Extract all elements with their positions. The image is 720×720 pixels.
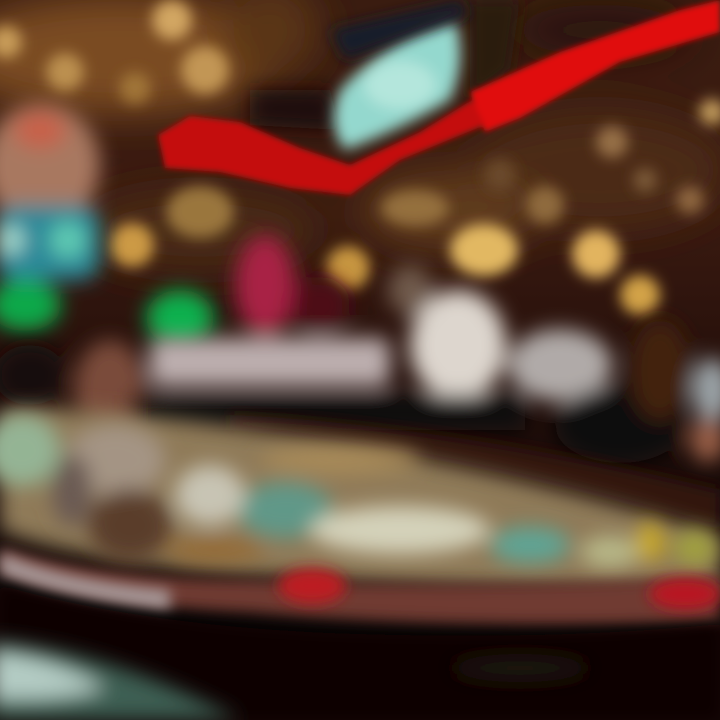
felt bbox=[0, 408, 720, 590]
ceiling glow bbox=[0, 0, 720, 270]
table rail back bbox=[230, 415, 720, 530]
table edge bbox=[0, 548, 720, 624]
teal screen bbox=[334, 20, 460, 150]
dark ceiling beam bbox=[470, 0, 520, 100]
left sign bbox=[0, 103, 214, 346]
red ribbon bbox=[158, 0, 720, 195]
foreground chip bbox=[0, 640, 240, 720]
lower dark table base bbox=[0, 585, 720, 720]
table surface bbox=[0, 408, 720, 624]
crowd bbox=[0, 235, 720, 463]
ceiling lights bbox=[0, 0, 720, 315]
